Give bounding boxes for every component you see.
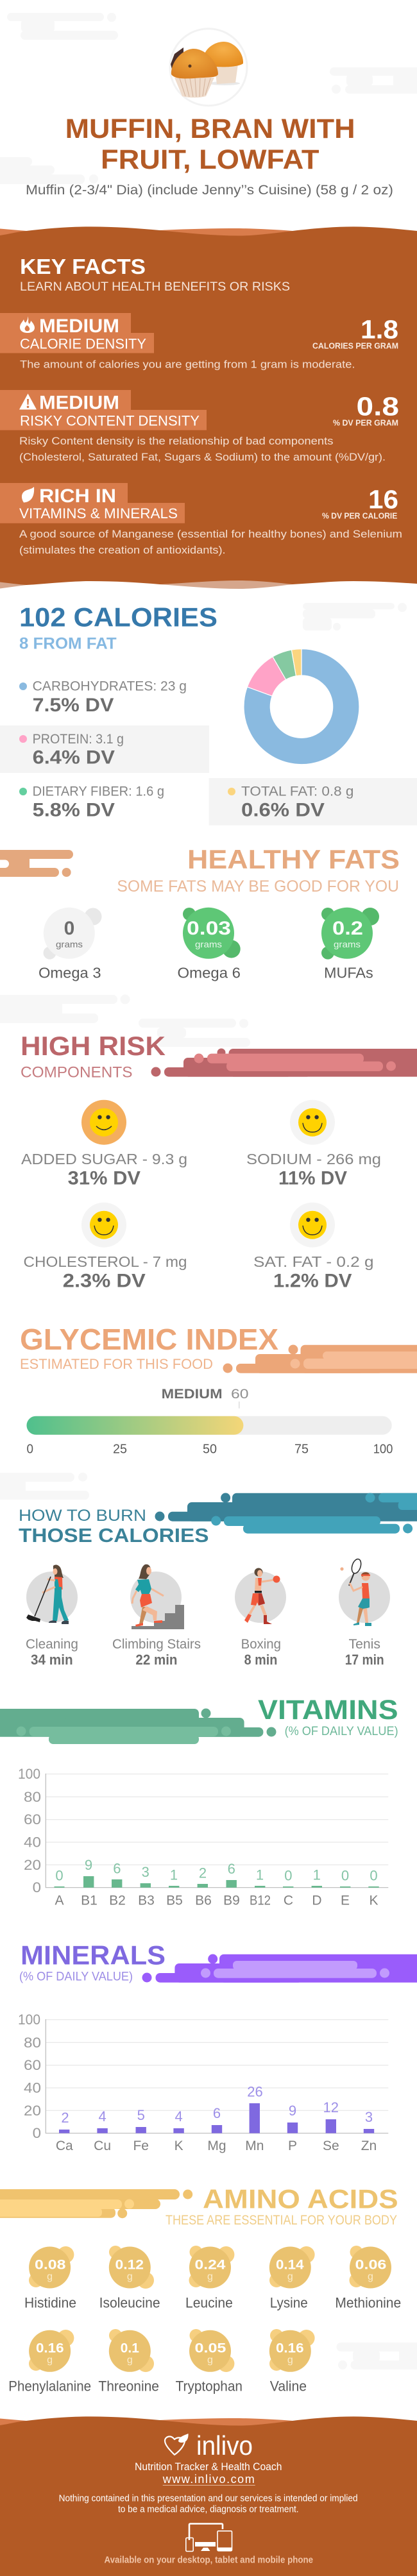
activity: climbing stairs (112, 1564, 201, 1668)
chart: minerals bar chart: 5 (137, 2107, 145, 2123)
heading: healthy fats: HEALTHY FATS (187, 844, 400, 874)
macro: protein (19, 732, 124, 768)
macro: dietary fiber: 5.8% DV (33, 799, 115, 820)
amino: histidine: Histidine (24, 2295, 76, 2311)
amino: methionine: Methionine (335, 2295, 401, 2311)
amino: threonine: Threonine (98, 2378, 159, 2394)
risk: cholesterol (23, 1203, 187, 1292)
chart: minerals bar chart: 9 (289, 2103, 296, 2119)
risk: sodium: 11% DV (278, 1167, 347, 1189)
amino: methionine: g (368, 2271, 373, 2282)
heading: glycemic index: ESTIMATED FOR THIS FOOD (20, 1356, 213, 1372)
risk: added sugar: ADDED SUGAR - 9.3 g (21, 1151, 187, 1167)
activity: climbing stairs: Climbing Stairs (112, 1637, 201, 1652)
amino: lysine (269, 2246, 315, 2311)
chart: minerals bar chart: 80 (24, 2035, 41, 2051)
chart: minerals bar chart: Fe (133, 2139, 149, 2153)
chart: glycemic index gauge (27, 1385, 393, 1457)
chart: minerals bar chart: 20 (24, 2103, 41, 2119)
chart: vitamins bar chart: C (284, 1893, 293, 1908)
amino: valine: Valine (270, 2378, 307, 2394)
icon: leaf (22, 487, 34, 503)
website link: www.inlivo.com (162, 2473, 255, 2486)
amino: tryptophan: g (207, 2355, 213, 2366)
amino: isoleucine: Isoleucine (99, 2295, 160, 2311)
activity: tennis: Tenis (349, 1637, 380, 1652)
background: protein row (0, 725, 209, 773)
stat: omega 3: 0 (64, 918, 74, 939)
heading: how to burn those calories: THOSE CALORIES (19, 1524, 209, 1546)
chart: glycemic index gauge: 50 (203, 1443, 217, 1457)
chart: minerals bar chart: Ca (56, 2139, 73, 2153)
panel: footer (0, 2416, 417, 2576)
stat: mufas: MUFAs (324, 965, 373, 981)
chart: minerals bar chart: 0 (33, 2125, 41, 2141)
amino: tryptophan: 0.05 (195, 2341, 226, 2355)
heading: vitamins: (% OF DAILY VALUE) (285, 1725, 398, 1738)
chart: vitamins bar chart: B9 (223, 1893, 240, 1908)
chart: glycemic index gauge: 25 (113, 1443, 127, 1457)
banner: healthy fats decoration (0, 850, 73, 877)
chart: vitamins bar chart: 40 (24, 1835, 41, 1850)
fact: rich in vitamins and minerals: (stimulates the creation of antioxidants). (19, 544, 226, 556)
chart: vitamins bar chart: 0 (341, 1868, 349, 1884)
heading: how to burn those calories: HOW TO BURN (19, 1507, 146, 1525)
chart: vitamins bar chart: K (369, 1893, 379, 1908)
tagline: Nutrition Tracker & Health Coach (135, 2461, 282, 2473)
heading: minerals: MINERALS (21, 1940, 166, 1970)
chart: minerals bar chart: 60 (24, 2057, 41, 2073)
chart: minerals bar chart: Mg (207, 2139, 226, 2153)
fact: risky content density: 0.8 (357, 391, 399, 421)
macro: carbohydrates: CARBOHYDRATES: 23 g (33, 679, 187, 694)
activity: tennis (339, 1558, 390, 1668)
chart: minerals bar chart: P (288, 2139, 297, 2153)
fact: rich in vitamins and minerals (0, 483, 402, 556)
chart: vitamins bar chart: 20 (24, 1857, 41, 1873)
fact: calorie density: 1.8 (361, 314, 398, 344)
subtitle: serving size: Muffin (2-3/4" Dia) (include Jenny’’s Cuisine) (58 g / 2 oz) (26, 183, 393, 198)
availability note: Available on your desktop, tablet and mobile phone (104, 2555, 313, 2566)
risk: saturated fat: SAT. FAT - 0.2 g (253, 1253, 373, 1270)
chart: minerals bar chart: 40 (24, 2080, 41, 2096)
chart: vitamins bar chart: B3 (138, 1893, 155, 1908)
macro: dietary fiber (19, 784, 164, 820)
amino: histidine (24, 2246, 76, 2311)
chart: vitamins bar chart: B2 (109, 1893, 126, 1908)
chart: minerals bar chart: 100 (18, 2012, 40, 2028)
risk: saturated fat: 1.2% DV (273, 1271, 352, 1292)
chart: minerals bar chart: 6 (213, 2105, 221, 2121)
banner: glycemic index decoration (223, 1344, 417, 1373)
chart: vitamins bar chart: D (312, 1893, 322, 1908)
activity: climbing stairs: 22 min (135, 1652, 177, 1668)
chart: vitamins bar chart: 9 (85, 1857, 92, 1873)
fact: risky content density: Risky Content density is the relationship of bad components (19, 435, 334, 447)
chart: vitamins bar chart: B6 (195, 1893, 212, 1908)
chart: glycemic index gauge: 100 (373, 1443, 393, 1457)
chart: vitamins bar chart: 1 (256, 1867, 264, 1883)
amino: phenylalanine: Phenylalanine (8, 2378, 91, 2394)
risk: added sugar (21, 1100, 187, 1189)
chart: minerals bar chart: 12 (323, 2099, 339, 2115)
macro: total fat: 0.6% DV (241, 799, 325, 820)
fact: rich in vitamins and minerals: % DV PER CALORIE (322, 511, 398, 520)
heading: calories: 8 FROM FAT (19, 635, 117, 653)
chart: glycemic index gauge: 0 (27, 1443, 33, 1457)
heading: how to burn those calories (19, 1507, 209, 1546)
heading: glycemic index: GLYCEMIC INDEX (20, 1323, 278, 1356)
risk: cholesterol: CHOLESTEROL - 7 mg (23, 1253, 187, 1270)
heading: healthy fats (117, 844, 400, 895)
chart: glycemic index gauge: 60 (231, 1385, 249, 1402)
logo: inlivo (165, 2430, 253, 2461)
chart: vitamins bar chart: 0 (284, 1868, 293, 1884)
chart: vitamins bar chart: 1 (170, 1867, 178, 1883)
chart: vitamins bar chart: 0 (33, 1879, 41, 1895)
stat: mufas (321, 908, 379, 981)
chart: glycemic index gauge: 75 (294, 1443, 309, 1457)
amino: leucine: Leucine (185, 2295, 233, 2311)
chart: calorie donut (244, 649, 359, 765)
fact: rich in vitamins and minerals: VITAMINS & MINERALS (19, 505, 178, 521)
risk: added sugar: 31% DV (68, 1167, 140, 1189)
heading: calories (19, 602, 217, 653)
fact: rich in vitamins and minerals: 16 (368, 484, 398, 514)
amino: valine: g (287, 2355, 293, 2366)
fact: risky content density: % DV PER GRAM (333, 418, 398, 427)
heading: key facts (20, 255, 290, 294)
amino: valine (269, 2329, 315, 2394)
heading: key facts: LEARN ABOUT HEALTH BENEFITS OR RISKS (20, 280, 290, 294)
macro: carbohydrates: 7.5% DV (33, 695, 114, 716)
icon: muffin photo (170, 29, 247, 106)
heading: amino acids: AMINO ACIDS (203, 2184, 398, 2214)
stat: mufas: 0.2 (332, 918, 363, 939)
risk: saturated fat (253, 1203, 373, 1292)
chart: vitamins bar chart: 0 (370, 1868, 378, 1884)
chart: vitamins bar chart: B5 (166, 1893, 183, 1908)
stat: omega 3: grams (56, 939, 83, 949)
fact: calorie density: CALORIES PER GRAM (312, 341, 398, 351)
amino: isoleucine: 0.12 (115, 2258, 144, 2273)
fact: calorie density (0, 313, 398, 370)
heading: glycemic index (20, 1323, 278, 1372)
stat: omega 6: Omega 6 (177, 965, 241, 981)
heading: high risk (21, 1031, 166, 1081)
amino: methionine (335, 2246, 401, 2311)
activity: tennis: 17 min (345, 1652, 384, 1668)
banner: vitamins decoration (0, 1709, 276, 1744)
disclaimer: Nothing contained in this presentation and our services is intended or implied (59, 2493, 358, 2504)
disclaimer: to be a medical advice, diagnosis or treatment. (118, 2505, 299, 2515)
amino: threonine: 0.1 (121, 2341, 139, 2355)
chart: vitamins bar chart: 6 (113, 1861, 121, 1877)
heading: high risk: HIGH RISK (21, 1031, 166, 1061)
icon: flame (20, 316, 35, 333)
chart: minerals bar chart (18, 2012, 388, 2153)
fact: risky content density (0, 390, 399, 463)
chart: glycemic index gauge: MEDIUM (162, 1385, 223, 1402)
chart: vitamins bar chart: 2 (199, 1865, 207, 1881)
amino: leucine (185, 2246, 234, 2311)
fact: rich in vitamins and minerals: A good source of Manganese (essential for healthy bones) and Selenium (19, 528, 402, 540)
chart: minerals bar chart: K (174, 2139, 183, 2153)
stat: omega 3: Omega 3 (38, 965, 101, 981)
amino: isoleucine: g (127, 2271, 133, 2282)
macro: carbohydrates (19, 679, 187, 716)
logo: inlivo: inlivo (196, 2430, 253, 2461)
chart: minerals bar chart: 3 (365, 2109, 373, 2125)
amino: threonine (98, 2329, 159, 2394)
title (65, 114, 355, 175)
activity: cleaning (26, 1564, 78, 1668)
chart: vitamins bar chart: 80 (24, 1789, 41, 1805)
amino: leucine: 0.24 (195, 2258, 226, 2273)
amino: histidine: g (47, 2271, 53, 2282)
amino: isoleucine (99, 2246, 160, 2311)
stat: omega 6: 0.03 (187, 918, 231, 939)
macro: total fat: TOTAL FAT: 0.8 g (241, 784, 353, 799)
chart: vitamins bar chart: 100 (18, 1766, 40, 1782)
activity: boxing: Boxing (241, 1637, 281, 1652)
heading: amino acids (166, 2184, 398, 2228)
fact: risky content density: MEDIUM (39, 393, 119, 414)
chart: vitamins bar chart: 6 (228, 1861, 235, 1877)
stat: omega 3 (38, 908, 101, 981)
banner: burn calories decoration (155, 1493, 417, 1534)
heading: minerals: (% OF DAILY VALUE) (19, 1970, 133, 1984)
amino: histidine: 0.08 (35, 2258, 66, 2273)
chart: minerals bar chart: Mn (245, 2139, 264, 2153)
title: MUFFIN, BRAN WITH (65, 114, 355, 144)
disclaimer (59, 2493, 358, 2515)
banner: amino acids decoration (0, 2189, 192, 2218)
chart: vitamins bar chart: 0 (55, 1868, 64, 1884)
background: total fat row (209, 778, 417, 826)
chart: minerals bar chart: Se (323, 2139, 339, 2153)
chart: minerals bar chart: 4 (98, 2108, 106, 2124)
risk: sodium: SODIUM - 266 mg (246, 1151, 381, 1167)
icon: warning triangle (19, 394, 37, 409)
risk: sodium (246, 1100, 381, 1189)
heading: minerals (19, 1940, 166, 1984)
fact: risky content density: (Cholesterol, Saturated Fat, Sugars & Sodium) to the amount (%DV/gr). (19, 451, 386, 463)
banner: high risk decoration (151, 1048, 417, 1077)
banner: minerals decoration (142, 1954, 417, 1983)
amino: leucine: g (207, 2271, 213, 2282)
heading: vitamins: VITAMINS (258, 1695, 398, 1725)
amino: threonine: g (127, 2355, 133, 2366)
heading: key facts: KEY FACTS (20, 255, 146, 278)
chart: vitamins bar chart: E (341, 1893, 350, 1908)
chart: vitamins bar chart: A (55, 1893, 64, 1908)
chart: vitamins bar chart (18, 1766, 388, 1908)
chart: vitamins bar chart: 60 (24, 1811, 41, 1827)
fact: calorie density: The amount of calories you are getting from 1 gram is moderate. (20, 358, 355, 370)
fact: rich in vitamins and minerals: RICH IN (39, 486, 116, 507)
chart: minerals bar chart: Cu (94, 2139, 111, 2153)
chart: minerals bar chart: Zn (361, 2139, 377, 2153)
macro: protein: PROTEIN: 3.1 g (33, 732, 124, 747)
amino: phenylalanine: 0.16 (36, 2341, 64, 2355)
stat: omega 6: grams (195, 939, 222, 949)
amino: methionine: 0.06 (355, 2258, 386, 2273)
amino: lysine: 0.14 (276, 2258, 304, 2273)
macro: protein: 6.4% DV (33, 747, 115, 768)
chart: vitamins bar chart: B12 (250, 1893, 271, 1908)
amino: tryptophan (176, 2329, 243, 2394)
panel: key facts (0, 226, 417, 589)
fact: calorie density: MEDIUM (39, 316, 119, 337)
chart: minerals bar chart: 4 (174, 2108, 183, 2124)
amino: valine: 0.16 (276, 2341, 304, 2355)
activity: boxing (235, 1568, 286, 1668)
icon: devices (186, 2523, 232, 2552)
amino: phenylalanine: g (47, 2355, 53, 2366)
risk: cholesterol: 2.3% DV (63, 1271, 146, 1292)
title: FRUIT, LOWFAT (101, 144, 319, 175)
macro: total fat (228, 784, 353, 820)
chart: vitamins bar chart: 1 (313, 1867, 321, 1883)
heading: healthy fats: SOME FATS MAY BE GOOD FOR YOU (117, 877, 399, 895)
stat: mufas: grams (334, 939, 361, 949)
heading: vitamins (258, 1695, 398, 1738)
stat: omega 6 (177, 908, 241, 981)
fact: risky content density: RISKY CONTENT DENSITY (20, 412, 200, 428)
amino: phenylalanine (8, 2330, 91, 2394)
fact: calorie density: CALORIE DENSITY (20, 336, 146, 352)
chart: vitamins bar chart: B1 (81, 1893, 98, 1908)
chart: vitamins bar chart: 3 (142, 1864, 149, 1880)
activity: cleaning: 34 min (31, 1652, 73, 1668)
activity: boxing: 8 min (244, 1652, 277, 1668)
activity: cleaning: Cleaning (26, 1637, 78, 1652)
chart: minerals bar chart: 2 (61, 2110, 69, 2126)
heading: high risk: COMPONENTS (21, 1063, 132, 1081)
amino: lysine: g (287, 2271, 293, 2282)
chart: minerals bar chart: 26 (247, 2083, 263, 2099)
amino: tryptophan: Tryptophan (176, 2378, 243, 2394)
macro: dietary fiber: DIETARY FIBER: 1.6 g (33, 784, 164, 799)
heading: calories: 102 CALORIES (19, 602, 217, 632)
amino: lysine: Lysine (270, 2295, 308, 2311)
